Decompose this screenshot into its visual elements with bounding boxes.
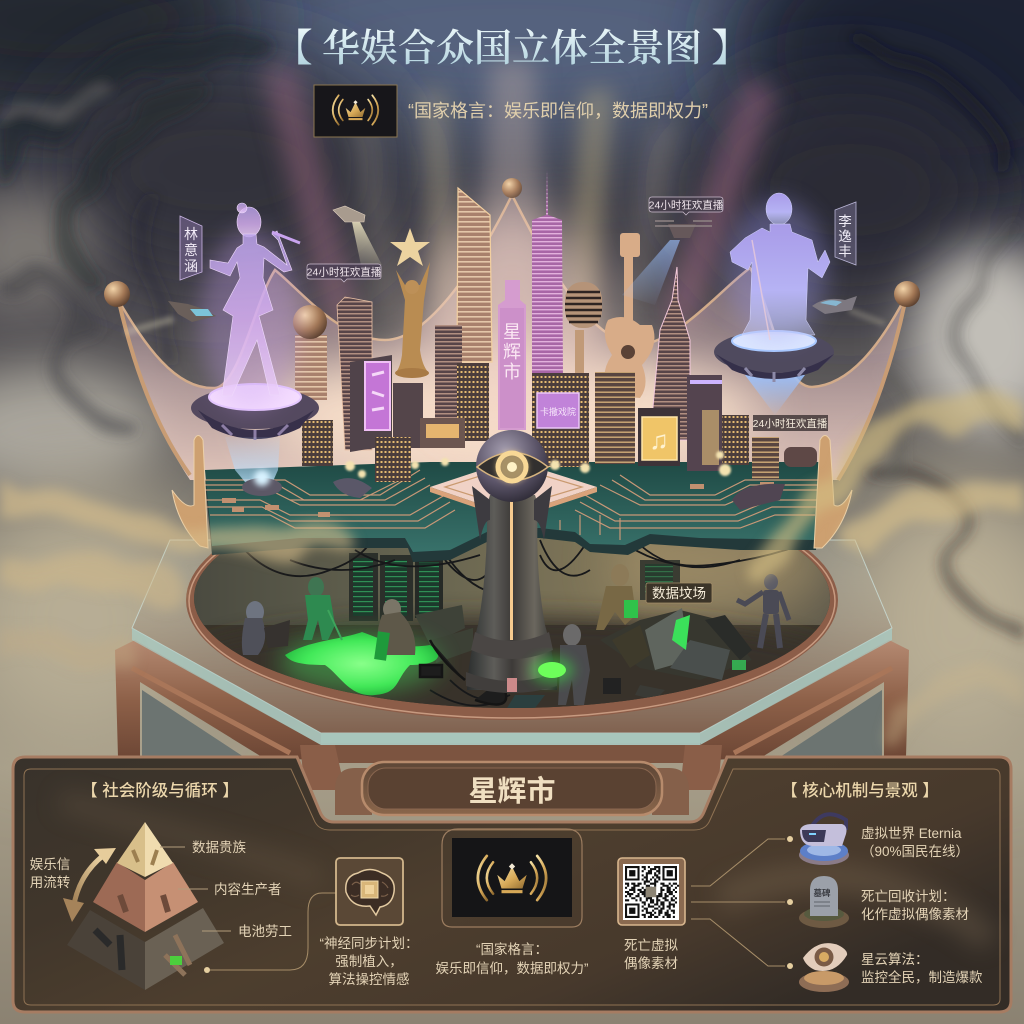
building: small dark gold windows	[302, 420, 333, 466]
hologram: singer 李逸丰	[727, 193, 830, 340]
name tag: 李逸丰	[835, 202, 856, 265]
tag: data graveyard	[646, 583, 712, 603]
building: midtown block	[435, 325, 462, 420]
floor debris and cables	[420, 640, 665, 712]
tag: data graveyard: 数据坟场	[652, 586, 706, 601]
worker: green hazmat	[303, 577, 342, 640]
drone with blue spotlight	[622, 221, 712, 305]
toxic green puddle	[285, 632, 438, 695]
name tag: 李逸丰: 李	[838, 214, 852, 229]
central emblem frame	[442, 829, 582, 927]
text: dead virtual idol assets: 偶像素材	[624, 956, 678, 971]
right crown post	[814, 436, 852, 548]
tier: content producers	[93, 862, 198, 932]
star city tower: 星	[503, 322, 521, 342]
icon: all-seeing eye	[799, 943, 849, 992]
building: microphone tower	[293, 305, 327, 400]
circuit-board island	[205, 462, 820, 562]
text: dead virtual idol assets: 死亡虚拟	[624, 938, 678, 953]
name tag: 李逸丰: 丰	[838, 244, 852, 259]
cycle arrow	[63, 848, 116, 922]
building: low gold sign	[420, 418, 465, 448]
building: music sign	[638, 408, 680, 466]
hologram platform: right	[714, 331, 834, 415]
building: neon right	[687, 375, 722, 471]
garden lights	[345, 451, 731, 478]
live tag: left: 24小时狂欢直播	[307, 266, 382, 278]
name tag: 林意涵: 林	[184, 226, 198, 242]
live tag: top right	[649, 197, 724, 215]
worker: tan hood with bucket	[596, 564, 638, 630]
cycle label: 娱乐信	[30, 857, 70, 872]
text: national motto: “国家格言：	[476, 941, 548, 957]
star city tower: 市	[503, 362, 521, 382]
left crown post	[172, 436, 208, 548]
left section heading: 【 社会阶级与循环 】	[81, 781, 239, 800]
tier: data aristocrats	[117, 822, 173, 877]
icon: tombstone: 墓碑	[813, 888, 831, 898]
building: low front	[375, 437, 411, 482]
cycle label	[30, 857, 70, 890]
surveillance eye tower	[466, 430, 557, 693]
light rays behind the city	[262, 60, 778, 400]
tier: battery labourers	[67, 908, 224, 990]
building: angular tower	[337, 297, 372, 450]
connectors: QR to mechanisms	[691, 836, 793, 969]
icon: brain chip	[336, 858, 403, 925]
label: data aristocrats: 数据贵族	[192, 840, 246, 855]
glass case	[132, 540, 892, 745]
flying car: right	[812, 296, 885, 326]
building: purple billboard	[350, 355, 392, 452]
text: virtual world: （90%国民在线）	[861, 844, 969, 859]
trophy statue	[390, 228, 430, 378]
scrap pile	[618, 608, 752, 680]
name tag: 李逸丰: 逸	[838, 229, 852, 244]
text: neural sync plan: 算法操控情感	[328, 971, 410, 987]
building: right lit block with purple sign: 卡撒戏院	[540, 406, 576, 417]
worker: grey hood with canister	[374, 599, 415, 661]
text: death recycling plan: 化作虚拟偶像素材	[861, 907, 969, 922]
text: virtual world: 虚拟世界 Eternia	[861, 826, 962, 841]
text: neural sync plan: 强制植入，	[335, 954, 403, 969]
underground bowl: data graveyard	[186, 538, 838, 720]
building: far right gold	[722, 415, 749, 465]
star city tower: 辉	[503, 342, 521, 362]
QR code	[618, 858, 685, 925]
icon: tombstone	[799, 876, 849, 928]
text: death recycling plan: 死亡回收计划：	[861, 889, 956, 904]
cycle label: 用流转	[30, 875, 70, 890]
connector: pyramid to brain	[204, 893, 336, 973]
city name plate: 星辉市	[468, 775, 556, 808]
giant microphone	[565, 282, 602, 378]
star city tower	[498, 280, 526, 430]
live tag: top right: 24小时狂欢直播	[649, 198, 724, 212]
title: 【 华娱合众国立体全景图 】	[274, 28, 750, 70]
text: nebula algorithm	[861, 952, 983, 985]
text: national motto	[436, 941, 588, 976]
hologram: singer 林意涵	[200, 203, 300, 410]
city skyline	[293, 170, 817, 510]
copper display case frame	[115, 640, 909, 790]
text: virtual world	[861, 826, 969, 859]
hologram platform: left	[191, 384, 319, 496]
label: content producers: 内容生产者	[214, 881, 282, 897]
pyramid labels	[160, 840, 292, 939]
text: death recycling plan	[861, 889, 969, 922]
building: short dark	[393, 383, 423, 448]
text: dead virtual idol assets	[624, 938, 678, 971]
flying vehicle with spotlight	[333, 206, 382, 270]
name tag: 林意涵: 涵	[184, 258, 198, 274]
motto line: “国家格言：娱乐即信仰，数据即权力”	[408, 101, 708, 121]
vehicles and small right shapes	[333, 447, 817, 510]
right section heading: 【 核心机制与景观 】	[781, 781, 939, 800]
label: battery labourers: 电池劳工	[238, 924, 292, 939]
building: dotted windows	[457, 363, 489, 441]
text: neural sync plan: “神经同步计划：	[320, 936, 418, 951]
text: neural sync plan	[320, 936, 418, 987]
name tag: 林意涵: 意	[184, 242, 198, 258]
text: national motto: 娱乐即信仰，数据即权力”	[436, 960, 588, 976]
social class pyramid	[67, 822, 224, 990]
building: right lit block with purple sign	[532, 373, 589, 467]
live tag: left	[307, 264, 382, 282]
golden dust clouds	[0, 403, 1024, 730]
text: nebula algorithm: 监控全民，制造爆款	[861, 969, 983, 985]
name tag: 林意涵	[180, 216, 202, 280]
art deco skyscraper	[650, 267, 700, 440]
server racks	[349, 553, 680, 663]
city name plate	[335, 762, 689, 815]
robot	[737, 574, 789, 648]
skyscraper: tall pink right	[532, 170, 563, 380]
bottom info panel	[13, 757, 1011, 1012]
text: nebula algorithm: 星云算法：	[861, 952, 928, 967]
giant guitar	[604, 233, 654, 398]
building: tall striped	[595, 372, 635, 464]
live tag: right: 24小时狂欢直播	[753, 417, 828, 430]
skyscraper: tall glass left	[457, 188, 492, 362]
building: small right	[752, 437, 779, 479]
crown glass shell with balls	[104, 178, 920, 480]
building: music sign: ♫	[649, 425, 669, 455]
worker: crouching grey	[242, 601, 290, 655]
worker: holding glowing block	[530, 624, 590, 705]
central pedestal plate	[430, 460, 597, 520]
hanging cables	[240, 540, 800, 706]
motto logo badge	[314, 85, 397, 137]
flying car: left	[125, 301, 216, 335]
icon: VR headset on platform	[799, 814, 849, 865]
